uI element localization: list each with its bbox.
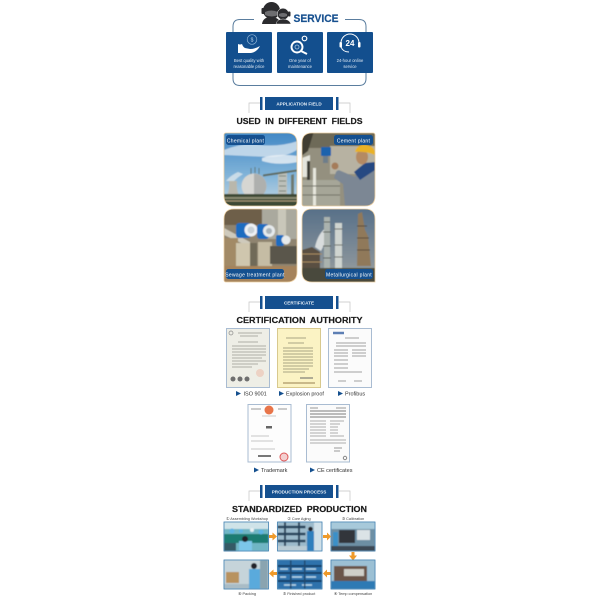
certificate: CE certificates — [306, 404, 350, 462]
label: profibus — [338, 391, 365, 398]
step 4 label: temp compensation: ④ Temp compensation — [334, 592, 372, 596]
photo: finished product — [278, 560, 322, 589]
certificate: ISO 9001 — [226, 328, 270, 388]
photo: calibration — [331, 522, 375, 551]
photo: packing — [224, 560, 268, 589]
heading: certification authority: CERTIFICATION AUTHORITY — [236, 316, 363, 325]
section banner: production process — [249, 485, 350, 501]
panel: maintenance: One year of — [289, 58, 312, 63]
certificate: trademark — [248, 404, 291, 462]
arrow: step 5 to 6 — [269, 570, 277, 578]
photo: core aging — [278, 522, 322, 551]
photo: metallurgical plant — [300, 207, 378, 285]
label: chemical plant: Chemical plant — [227, 138, 264, 144]
panel: maintenance: maintenance — [288, 64, 313, 69]
step 2 label: core aging: ② Core Aging — [287, 517, 311, 521]
label: cement plant: Cement plant — [337, 138, 370, 144]
panel: best quality: Best quality with — [234, 58, 265, 63]
arrow: step 2 to 3 — [323, 532, 331, 540]
panel: online service — [327, 32, 373, 73]
label: metallurgical plant: Metallurgical plant — [326, 272, 372, 278]
icon: hand with coin: $ — [251, 38, 254, 44]
panel: best quality: reasonable price — [234, 64, 265, 69]
photo: temp compensation — [331, 560, 375, 589]
icon: 24 hour headset: 24 — [346, 39, 355, 48]
step 6 label: packing: ⑥ Packing — [238, 592, 256, 596]
photo: cement plant — [300, 131, 378, 209]
section banner: certificate: CERTIFICATE — [284, 300, 314, 305]
section banner: application field: APPLICATION FIELD — [276, 101, 322, 106]
title: service: SERVICE — [294, 13, 338, 25]
service bracket frame — [233, 20, 366, 86]
label: profibus: Profibus — [345, 392, 365, 398]
label: CE certificates: CE certificates — [317, 468, 353, 474]
label: trademark: Trademark — [261, 468, 288, 474]
heading: standardized production: STANDARDIZED PRODUCTION — [232, 505, 367, 514]
section banner: production process: PRODUCTION PROCESS — [272, 489, 326, 494]
arrow: step 3 to 4 — [349, 552, 357, 560]
certificate: explosion proof — [278, 328, 320, 388]
arrow: step 4 to 5 — [323, 570, 331, 578]
panel: maintenance — [277, 32, 323, 73]
panel: best quality — [226, 32, 272, 73]
panel: online service: service — [343, 64, 357, 69]
label: explosion proof: Explosion proof — [286, 392, 324, 398]
label: ISO 9001: ISO 9001 — [244, 392, 267, 398]
certificate: profibus — [328, 328, 372, 388]
icon: magnifier and gear — [292, 36, 307, 54]
photo: chemical plant — [222, 131, 300, 209]
label: ISO 9001 — [236, 391, 267, 398]
arrow: step 1 to 2 — [269, 532, 277, 540]
section banner: application field — [249, 97, 350, 113]
step 3 label: calibration: ③ Calibration — [342, 517, 364, 521]
step 1 label: assembling workshop: ① Assembling Workshop — [226, 517, 268, 521]
section banner: certificate — [249, 296, 350, 312]
photo: sewage treatment plant — [222, 207, 300, 285]
label: sewage treatment plant: Sewage treatment plant — [225, 272, 285, 278]
step 5 label: finished product: ⑤ Finished product — [283, 592, 316, 596]
panel: online service: 24-hour online — [337, 58, 364, 63]
icon: service agents — [262, 2, 291, 24]
heading: used in different fields: USED IN DIFFERENT FIELDS — [236, 117, 363, 126]
photo: assembling workshop — [224, 522, 268, 551]
